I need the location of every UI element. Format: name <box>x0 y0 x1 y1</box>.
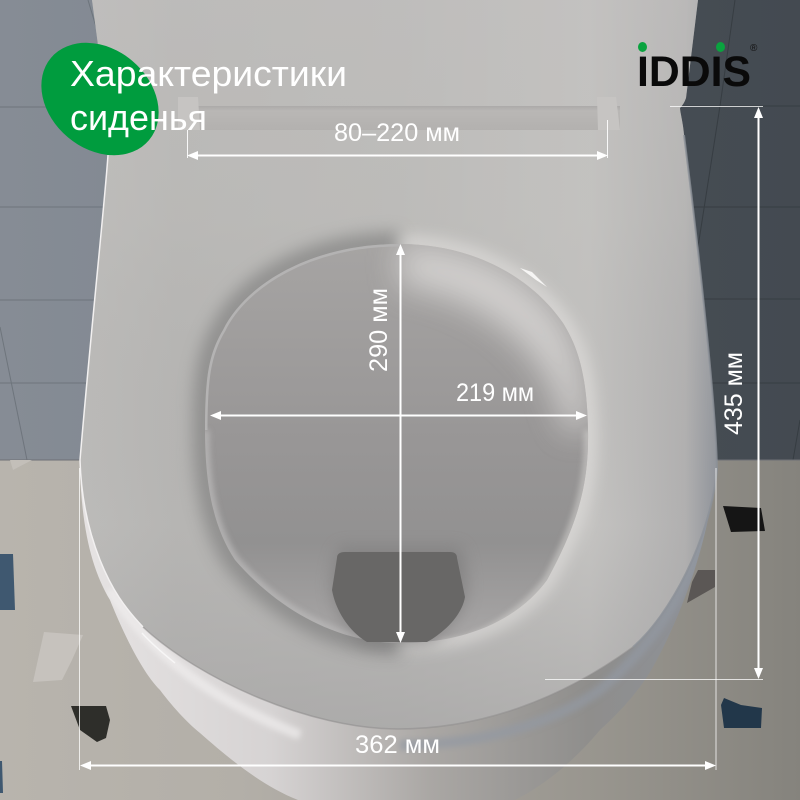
background wall <box>0 0 800 461</box>
dimension: seat length 435 мм <box>545 106 763 680</box>
title: Характеристики <box>70 53 347 94</box>
dimension: opening height 290 мм <box>365 244 405 643</box>
dimension: hinge spacing 80–220 мм <box>187 119 608 160</box>
toilet seat and lid <box>80 0 717 729</box>
green blob <box>19 20 181 178</box>
dimension: hinge spacing 80–220 мм: 80–220 мм <box>334 119 460 147</box>
bowl outlet <box>332 548 466 645</box>
bowl opening <box>205 244 588 643</box>
title <box>70 53 347 138</box>
hinge bar <box>178 97 678 130</box>
dimension: opening width 219 мм <box>210 379 587 420</box>
toilet body <box>80 470 716 800</box>
logo: IDDIS: IDDIS <box>637 48 751 96</box>
floor with terrazzo chips <box>0 459 800 800</box>
dimension: seat width 362 мм: 362 мм <box>355 731 440 759</box>
dimension: opening width 219 мм: 219 мм <box>456 379 534 407</box>
title: сиденья <box>70 97 207 138</box>
dimension: opening height 290 мм: 290 мм <box>365 288 393 372</box>
dimension: seat length 435 мм: 435 мм <box>720 352 748 435</box>
dimension: seat width 362 мм <box>80 468 716 770</box>
logo: IDDIS: ® <box>750 43 758 54</box>
rim highlight <box>142 633 175 663</box>
icon: specular highlight <box>520 268 547 287</box>
